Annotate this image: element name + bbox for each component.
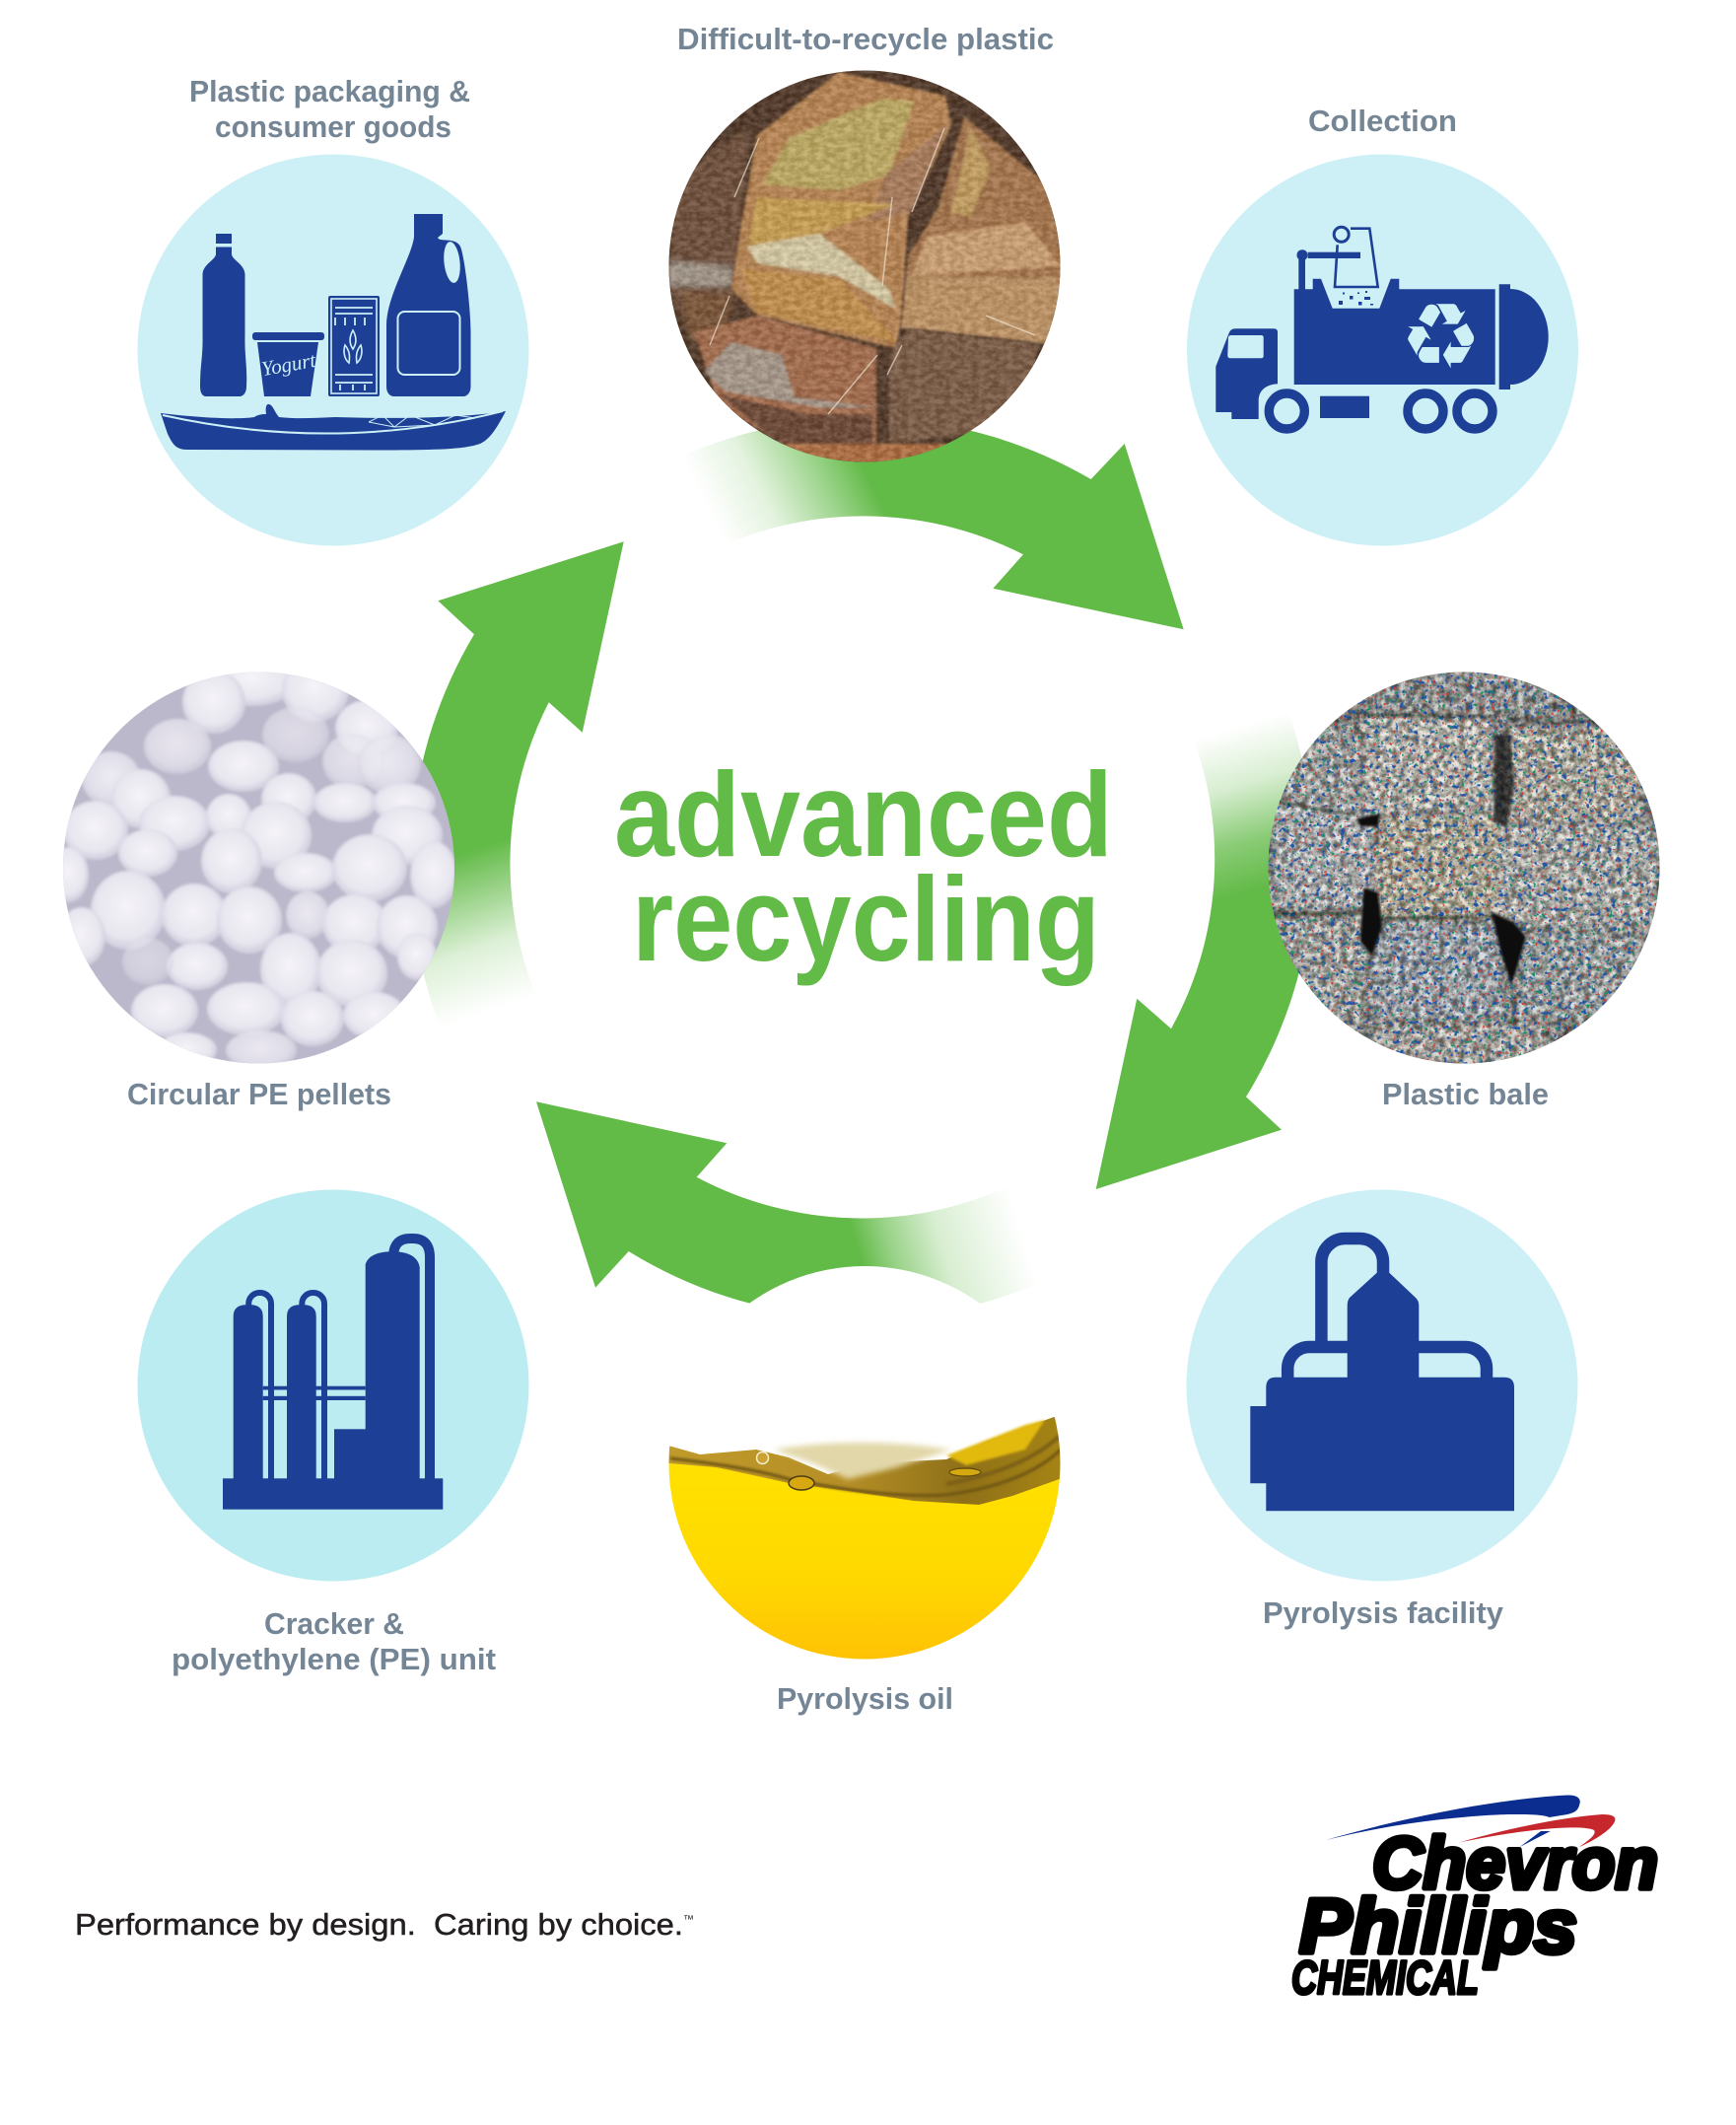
- photo: lower left bread loaf: [694, 316, 876, 446]
- label: cracker and polyethylene unit: [172, 1606, 496, 1676]
- label: pyrolysis facility: Pyrolysis facility: [1263, 1595, 1504, 1630]
- icon: truck cab: [1215, 328, 1278, 419]
- logo swoosh: small blue: [1520, 1831, 1551, 1847]
- photo: upper right bread loaf: [901, 116, 1063, 345]
- label: cracker and polyethylene unit: Cracker &: [264, 1606, 404, 1641]
- label: pyrolysis oil: Pyrolysis oil: [777, 1681, 953, 1716]
- photo: basket: [779, 444, 946, 463]
- tagline: Performance by design. Caring by choice.: [75, 1907, 683, 1942]
- photo: bright ripples: [946, 1420, 1045, 1465]
- photo: red plastic specks: [1267, 671, 1661, 1065]
- icon: recycling symbol: ♻: [1400, 284, 1482, 390]
- photo: bread grain: [668, 70, 1061, 462]
- icon: bottle: [200, 234, 246, 396]
- photo: yellow oil body: [668, 1463, 1061, 1666]
- logo wordmark: Phillips: [1299, 1882, 1577, 1969]
- icon: yogurt cup: [252, 332, 324, 396]
- icon: truck tank: [1294, 279, 1495, 385]
- label: plastic packaging and consumer goods: [189, 74, 470, 144]
- photo: dark ripples: [670, 1450, 1061, 1496]
- photo: plastic shred noise: [1267, 671, 1661, 1065]
- logo wordmark: Chevron: [1372, 1822, 1658, 1904]
- label: plastic packaging and consumer goods: Plastic packaging &: [189, 74, 470, 108]
- label: plastic bale: Plastic bale: [1382, 1077, 1549, 1111]
- logo swoosh: red: [1458, 1814, 1615, 1847]
- icon: jug: [386, 214, 471, 396]
- icon: cracker columns: [223, 1239, 443, 1510]
- panel: pyrolysis facility: [1187, 1189, 1577, 1582]
- panel: cracker and polyethylene unit: [138, 1189, 528, 1582]
- panel: collection: [1187, 154, 1578, 546]
- panel: pyrolysis oil photo: [667, 1266, 1065, 1666]
- icon: tank end cap: [1499, 284, 1549, 390]
- photo: upper left bread loaf: [731, 72, 951, 348]
- icon: yogurt cup: Yogurt: [259, 348, 318, 381]
- photo: lower right bread loaf: [889, 328, 1040, 444]
- logo: Chevron Phillips Chemical: [1291, 1795, 1658, 2005]
- icon: crane and bucket: [1297, 227, 1378, 306]
- photo: plastic bag highlights: [710, 128, 1035, 414]
- photo: oil bubbles: [757, 1452, 981, 1490]
- photo: pale reflection: [774, 1443, 951, 1479]
- icon: kayak: [161, 404, 506, 450]
- arrow: bottom, to cracker unit: [536, 1101, 1038, 1318]
- logo wordmark: CHEMICAL: [1291, 1952, 1479, 2005]
- panel: difficult-to-recycle plastic photo: [668, 70, 1063, 463]
- arrow: left, to packaging: [410, 541, 624, 1028]
- label: collection: Collection: [1308, 104, 1457, 138]
- logo wordmark: [1291, 1822, 1658, 2005]
- tagline: ™: [683, 1914, 694, 1926]
- icon: pyrolysis unit: [1250, 1239, 1514, 1511]
- label: difficult-to-recycle plastic: Difficult-to-recycle plastic: [677, 22, 1054, 56]
- logo swoosh: blue: [1326, 1795, 1580, 1840]
- panel: plastic bale photo: [1267, 671, 1661, 1065]
- photo: blue plastic specks: [1267, 671, 1661, 1065]
- icon: truck step: [1320, 396, 1369, 418]
- label: circular PE pellets: Circular PE pellets: [127, 1077, 391, 1111]
- photo: green plastic specks: [1267, 671, 1661, 1065]
- photo: dark gaps: [1272, 714, 1597, 984]
- photo: background shelf: [668, 128, 749, 340]
- label: cracker and polyethylene unit: polyethylene (PE) unit: [172, 1642, 496, 1676]
- title: advanced recycling: recycling: [632, 852, 1100, 986]
- title: advanced recycling: advanced: [614, 747, 1113, 882]
- photo: bale blocks: [1275, 673, 1656, 1065]
- icon: truck wheels: [1269, 393, 1493, 429]
- label: plastic packaging and consumer goods: consumer goods: [215, 109, 451, 144]
- panel: circular PE pellets photo: [49, 655, 458, 1070]
- arrow: right, to pyrolysis facility: [1096, 712, 1313, 1189]
- photo: gold surface band: [668, 1417, 1065, 1505]
- title: advanced recycling: [614, 747, 1113, 986]
- photo: pellets: [49, 655, 457, 1070]
- icon: snack bag: [328, 296, 380, 396]
- arrow: top, to collection: [681, 418, 1184, 629]
- panel: plastic packaging and consumer goods: [138, 154, 528, 546]
